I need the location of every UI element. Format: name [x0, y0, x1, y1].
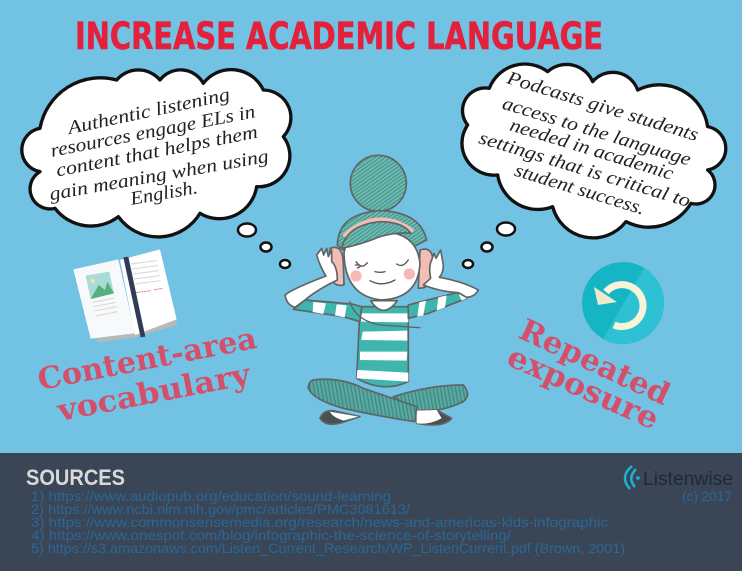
spine: [123, 257, 145, 337]
lighter diagonal: [603, 268, 664, 344]
left arm and hand: [285, 248, 337, 307]
label: repeated exposure: exposure: [502, 339, 664, 437]
cloud shape: right: [462, 64, 726, 238]
headphone cord: [350, 302, 420, 328]
right bubble text: settings that is critical to: [476, 128, 693, 212]
label: content-area vocabulary: vocabulary: [54, 357, 255, 429]
fringe: [342, 222, 411, 248]
right bubble text: needed in academic: [507, 115, 677, 185]
right page: [120, 249, 177, 335]
circle base: [582, 262, 664, 344]
neck collar: [371, 301, 397, 310]
right bubble text: Podcasts give students: [503, 67, 701, 146]
left bubble text: resources engage ELs in: [49, 101, 257, 162]
logo icon: [625, 466, 640, 489]
left bubble text: Authentic listening: [64, 84, 232, 140]
footer background: [0, 453, 742, 571]
sources heading: SOURCES: [26, 465, 125, 490]
right bubble text: [476, 67, 701, 220]
cloud shape: left: [22, 70, 291, 237]
left bubble text: [48, 84, 270, 210]
thought dots: right: [463, 222, 515, 268]
logo wordmark: Listenwise: [643, 469, 733, 490]
text lines: [93, 261, 161, 316]
picture: [86, 272, 114, 299]
back leg: [393, 385, 467, 412]
right bubble text: access to the language: [500, 93, 693, 170]
headphone cups: [328, 247, 344, 285]
headband: [345, 219, 412, 235]
left bubble text: content that helps them: [54, 122, 260, 181]
source list: 5) https://s3.amazonaws.com/Listen_Current_Research/WP_ListenCurrent.pdf (Brown, 2001): [31, 540, 625, 556]
cheeks: [350, 268, 415, 282]
source list: 2) https://www.ncbi.nlm.nih.gov/pmc/articles/PMC3081613/: [31, 501, 410, 517]
title: INCREASE ACADEMIC LANGUAGE: [75, 15, 603, 58]
thought dots: left: [238, 224, 290, 268]
hat: [337, 211, 427, 250]
left bubble text: English.: [128, 177, 199, 210]
arrow head: [594, 287, 617, 305]
right foot: [417, 410, 452, 425]
footer panel: [0, 453, 742, 571]
face: [344, 232, 420, 300]
right sleeve: [408, 293, 467, 318]
label: repeated exposure: Repeated: [514, 313, 675, 413]
book shadow: [96, 319, 177, 342]
source list: 3) https://www.commonsensemedia.org/research/news-and-americas-kids-infographic: [31, 514, 608, 530]
copyright: (c) 2017: [682, 488, 732, 504]
right bubble text: student success.: [512, 160, 647, 220]
thought bubble: right: [462, 64, 726, 268]
left page: [73, 259, 135, 339]
source list: 1) https://www.audiopub.org/education/sound-learning: [31, 488, 391, 504]
source list: 4) https://www.onespot.com/blog/infographic-the-science-of-storytelling/: [31, 527, 511, 543]
front leg: [308, 379, 417, 422]
label: content-area vocabulary: Content-area: [35, 321, 259, 398]
source list: [31, 488, 625, 556]
icon: open book: [73, 249, 177, 342]
thought bubble: left: [22, 70, 291, 268]
left bubble text: gain meaning when using: [48, 146, 270, 205]
highlighted line: [136, 288, 163, 293]
illustration: girl with headphones: [285, 155, 478, 425]
icon: replay: [582, 262, 664, 344]
right arm and hand: [423, 250, 478, 297]
logo: Listenwise: [625, 466, 733, 490]
eyes, nose and mouth: [355, 260, 408, 284]
hair bun: [350, 155, 406, 211]
left sleeve: [293, 300, 362, 322]
arrow arc: [606, 285, 643, 327]
left foot: [320, 411, 360, 424]
torso: [357, 307, 408, 387]
